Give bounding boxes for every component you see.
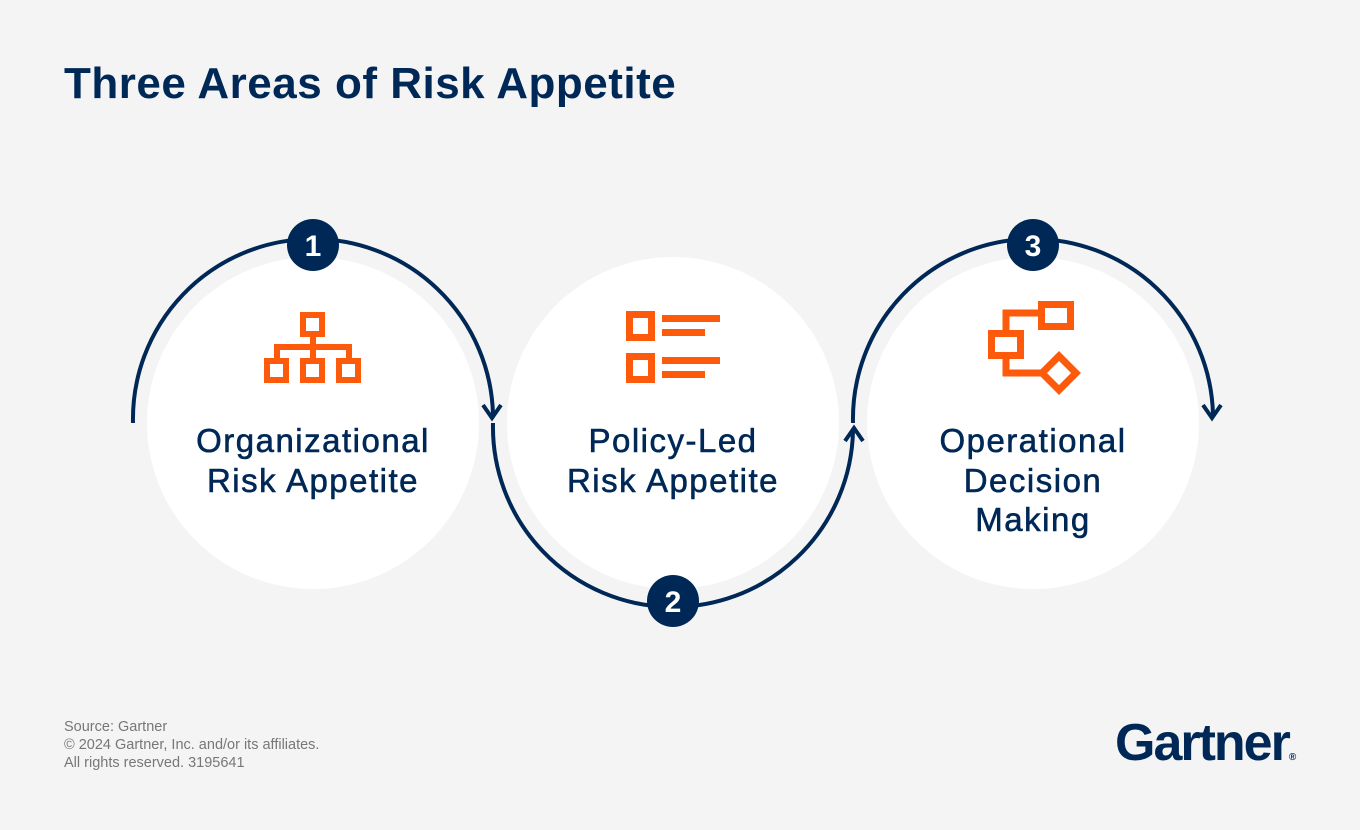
text: [196, 422, 430, 499]
source: Source: Gartner: [64, 719, 167, 735]
badges: 1: [305, 230, 321, 263]
badges: 3: [1025, 230, 1041, 263]
logo: Gartner®: [1115, 714, 1296, 772]
source: [64, 719, 319, 771]
arrows: [133, 239, 1221, 607]
panel: operational: [867, 257, 1199, 589]
panel: operational: Decision: [964, 462, 1102, 499]
text: Risk Appetite: [207, 462, 419, 499]
panel: organizational: [147, 257, 479, 589]
icon: org chart: [267, 315, 358, 380]
source: © 2024 Gartner, Inc. and/or its affiliates.: [64, 737, 319, 753]
icon: flow: [992, 304, 1076, 390]
panel: policy-led: Risk Appetite: [567, 462, 779, 499]
panel: policy-led: [507, 257, 839, 589]
title: Three Areas of Risk Appetite: [64, 59, 676, 108]
panel: operational: Operational: [939, 422, 1127, 459]
source: All rights reserved. 3195641: [64, 755, 245, 771]
text: Organizational: [196, 422, 430, 459]
badges: [287, 219, 1059, 627]
badges: 2: [665, 586, 681, 619]
panel: policy-led: Policy-Led: [588, 422, 758, 459]
icon: list: [630, 314, 652, 380]
panel: operational: Making: [975, 501, 1091, 538]
